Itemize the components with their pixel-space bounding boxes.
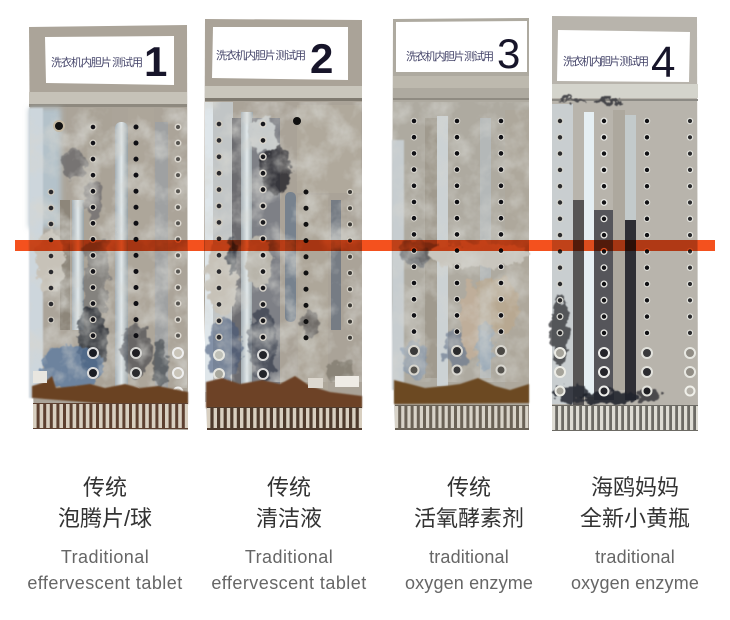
plate 3 paper label bbox=[396, 21, 527, 77]
caption 3 bbox=[405, 475, 533, 593]
caption 4: 全新小黄瓶 bbox=[580, 506, 690, 531]
caption 4: traditional bbox=[595, 547, 675, 567]
plate 3 ribs bbox=[392, 110, 529, 390]
plate 3 handwriting: 洗衣机内胆片 测试用 bbox=[406, 48, 494, 64]
caption 3: 传统 bbox=[447, 475, 491, 500]
plate 4 holes bbox=[555, 121, 695, 396]
plate 1 rust bbox=[32, 376, 188, 404]
caption 4 bbox=[571, 475, 699, 593]
plate 1 comb bbox=[33, 403, 188, 429]
caption 3: traditional bbox=[429, 547, 509, 567]
caption 2 bbox=[211, 475, 367, 593]
plate 4 comb bbox=[552, 405, 698, 431]
plate 3 comb bbox=[395, 405, 529, 430]
caption 1: effervescent tablet bbox=[27, 573, 183, 593]
plate 3 stains bbox=[398, 240, 530, 380]
plate 3 body bbox=[392, 18, 529, 430]
plate 4 paper label bbox=[557, 30, 690, 87]
caption 2: 清洁液 bbox=[256, 506, 322, 531]
plate 2 paper label bbox=[212, 27, 348, 82]
plate 1 stains bbox=[36, 150, 167, 391]
caption 1: Traditional bbox=[61, 547, 149, 567]
plate 2 bbox=[204, 19, 362, 430]
plate 4 bbox=[552, 16, 698, 431]
caption 2: 传统 bbox=[267, 475, 311, 500]
plate 3 holes bbox=[409, 121, 506, 374]
plate 1 cutout bbox=[33, 371, 47, 383]
plate 4 light band bbox=[552, 84, 698, 98]
plate 1 holes bbox=[51, 121, 183, 396]
caption 4: 海鸥妈妈 bbox=[591, 475, 679, 500]
plate 2 mottled wear bbox=[205, 102, 362, 382]
plate 1 body bbox=[29, 25, 188, 430]
plate 4 stains bbox=[552, 99, 662, 405]
plate 1 ribs bbox=[29, 108, 168, 398]
plate 1 mottled wear bbox=[30, 108, 187, 388]
plate 2 number: 2 bbox=[310, 35, 333, 82]
plate 2 rust and cutouts bbox=[206, 376, 362, 408]
plate 3 rust bbox=[394, 378, 529, 404]
plate 2 handwriting: 洗衣机内胆片 测试用 bbox=[216, 47, 306, 63]
plate 3 number: 3 bbox=[497, 30, 520, 77]
plate 1 light band bbox=[29, 92, 187, 104]
plate 4 handwriting: 洗衣机内胆片 测试用 bbox=[563, 53, 649, 69]
plate 4 body bbox=[552, 16, 698, 431]
caption 3: oxygen enzyme bbox=[405, 573, 533, 593]
caption 3: 活氧酵素剂 bbox=[414, 506, 524, 531]
plate 3 mottled wear bbox=[393, 102, 529, 382]
caption 1: 泡腾片/球 bbox=[58, 506, 152, 531]
plate 1 handwriting: 洗衣机内胆片 测试用 bbox=[51, 54, 143, 70]
plate 3 bbox=[392, 18, 530, 430]
plate 4 number: 4 bbox=[651, 38, 675, 87]
red comparison line bbox=[15, 240, 715, 251]
caption 1: 传统 bbox=[83, 475, 127, 500]
caption 4: oxygen enzyme bbox=[571, 573, 699, 593]
plate 1 number: 1 bbox=[144, 38, 167, 85]
plate 3 light band bbox=[393, 76, 529, 88]
caption 2: Traditional bbox=[245, 547, 333, 567]
caption 1 bbox=[27, 475, 183, 593]
plate 2 stains bbox=[207, 117, 354, 383]
plate 2 holes bbox=[214, 117, 350, 398]
plate 1 paper label bbox=[45, 36, 174, 85]
plate 1 bbox=[29, 25, 188, 430]
plate 2 comb bbox=[207, 407, 362, 430]
plate 4 ribs and dark channels bbox=[552, 104, 636, 405]
caption 2: effervescent tablet bbox=[211, 573, 367, 593]
plate 2 light band bbox=[205, 86, 362, 98]
plate 2 ribs bbox=[205, 102, 361, 402]
plate 2 body bbox=[204, 19, 362, 430]
